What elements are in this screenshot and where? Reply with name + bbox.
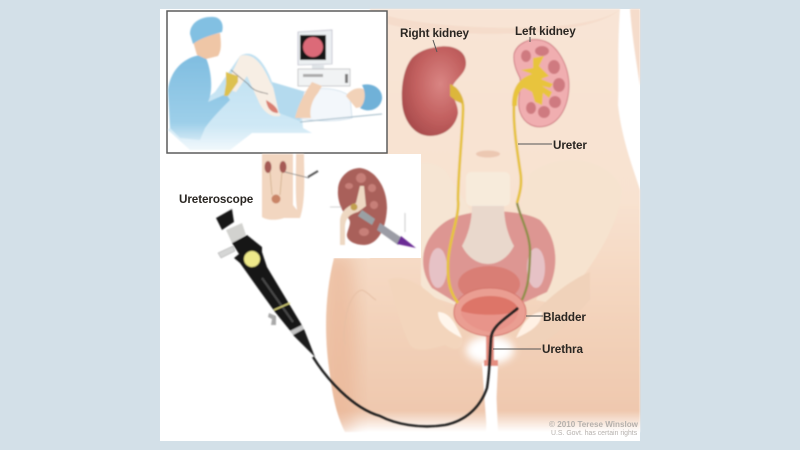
doctor gown	[168, 55, 230, 140]
surgical drape	[168, 54, 312, 150]
yellow band	[274, 303, 290, 310]
monitor	[298, 30, 332, 65]
bladder	[454, 288, 526, 336]
bladder dome	[461, 296, 518, 315]
credit line: © 2010 Terese Winslow	[549, 420, 639, 429]
valve	[268, 313, 276, 325]
kidney pyramids	[345, 173, 378, 236]
inset: back view and kidney detail	[262, 154, 421, 258]
rights line: U.S. Govt. has certain rights	[551, 430, 638, 437]
miniature ureteroscope	[358, 210, 416, 248]
small ureters	[270, 172, 282, 195]
back view body	[262, 154, 304, 220]
left thigh shading	[322, 255, 356, 432]
scope cable in inset	[231, 70, 268, 94]
inset white background	[262, 154, 421, 258]
label: bladder: Bladder	[543, 311, 586, 324]
doctor cap	[190, 17, 223, 44]
patient gown	[298, 89, 352, 121]
arm gap	[293, 154, 297, 210]
inset: doctor and patient procedure	[167, 11, 387, 153]
renal pelvis and calyces	[512, 56, 553, 106]
pubic openings	[438, 312, 462, 338]
scope body	[232, 235, 303, 333]
side port tube	[218, 246, 235, 258]
eyepiece	[216, 209, 234, 230]
tapered tip	[293, 329, 315, 357]
left ureter	[514, 104, 521, 203]
chest shading	[388, 9, 620, 34]
hip sockets	[429, 248, 447, 288]
yellow dial	[244, 251, 260, 267]
patient arm	[295, 82, 322, 118]
label: right kidney: Right kidney	[400, 27, 470, 40]
monitor screen	[300, 35, 326, 60]
right iliac bone	[520, 160, 622, 305]
right ureter top	[450, 84, 463, 104]
small bladder	[272, 194, 280, 204]
patient cap	[360, 84, 382, 110]
right kidney	[402, 46, 466, 136]
small kidneys	[264, 161, 272, 173]
gloved hand	[224, 72, 238, 96]
silver focus ring	[226, 223, 246, 243]
lumbar vertebrae	[466, 172, 510, 206]
inset frame	[167, 11, 387, 153]
doctor face	[192, 33, 221, 59]
kidney stones	[350, 204, 358, 210]
renal pyramids	[521, 46, 565, 118]
left ureter with scope	[517, 203, 530, 300]
body skin	[326, 9, 640, 432]
leader lines	[433, 37, 552, 349]
pelvic cavity	[423, 211, 555, 302]
equipment cart	[298, 65, 350, 86]
tiny label lines	[330, 207, 405, 232]
ureter tube and pelvis	[340, 186, 366, 245]
crotch gap	[482, 363, 498, 432]
bladder interior	[461, 296, 518, 332]
hip crease	[344, 290, 376, 345]
pelvic bone lower right	[518, 272, 590, 348]
pelvic bone lower left	[388, 278, 462, 350]
left kidney	[512, 40, 569, 127]
label: ureter: Ureter	[553, 139, 587, 152]
endoscopic view	[303, 37, 323, 57]
bed line	[300, 114, 382, 122]
labels	[179, 25, 639, 437]
label: ureteroscope: Ureteroscope	[179, 193, 254, 206]
cable	[313, 308, 518, 426]
label: left kidney: Left kidney	[515, 25, 576, 38]
white glow around urethra	[466, 336, 514, 364]
navel	[476, 150, 500, 158]
patient face	[346, 88, 366, 108]
panel: torso anatomy	[322, 9, 640, 432]
silver collar	[290, 325, 304, 335]
patient abdomen drape	[272, 82, 306, 121]
arm	[630, 9, 640, 86]
right ureter	[448, 87, 463, 303]
small scope handle	[308, 171, 318, 177]
patient raised leg	[225, 55, 280, 116]
body highlight	[262, 278, 293, 322]
ureteroscope instrument	[216, 209, 518, 426]
uterus mound	[458, 266, 520, 302]
sacrum	[462, 205, 514, 264]
infographic: ureteroscopy anatomy illustration	[160, 8, 641, 441]
label: urethra: Urethra	[542, 343, 583, 356]
left iliac bone	[392, 163, 470, 305]
urethra	[484, 332, 498, 366]
patient perineum	[266, 100, 278, 113]
small scope	[285, 172, 309, 178]
white image panel	[160, 9, 640, 441]
kidney cross section	[338, 168, 387, 245]
